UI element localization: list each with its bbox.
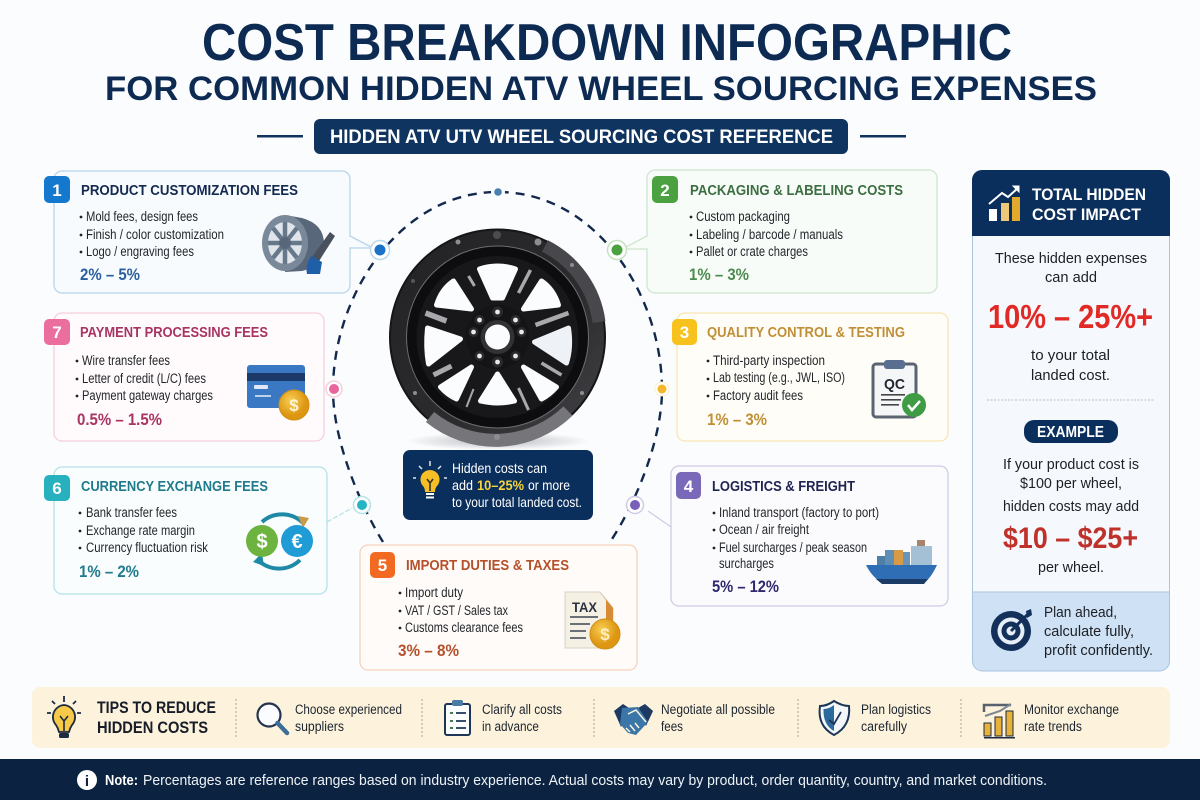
text: per wheel: per wheel. xyxy=(1038,560,1104,576)
callout: hidden costs summary: Hidden costs can xyxy=(452,460,547,476)
cost items: Factory audit fees xyxy=(713,388,803,403)
text: to your total landed cost: to your total xyxy=(1031,347,1110,364)
cost items xyxy=(713,505,879,571)
icon: info xyxy=(77,770,97,790)
footer: plan ahead: profit confidently. xyxy=(1044,642,1153,659)
badge 7 xyxy=(44,319,70,345)
icon: rising chart xyxy=(989,186,1020,221)
footer note bar: Percentages are reference ranges based on industry experience. Actual costs may vary by product, order quantity, country, and market conditions. xyxy=(143,773,1047,789)
footer: plan ahead: Plan ahead, xyxy=(1044,604,1117,621)
panel: 4 logistics and freight xyxy=(648,466,948,606)
tip: negotiate fees xyxy=(614,702,775,735)
tip: monitor exchange rate: Monitor exchange xyxy=(1024,702,1119,717)
panel: 3 quality control and testing xyxy=(672,313,948,441)
cost items: Fuel surcharges / peak season xyxy=(719,540,867,555)
badge 6: 6 xyxy=(52,479,62,498)
text: example description: If your product cost is xyxy=(1003,457,1139,473)
badge 3: 3 xyxy=(680,323,689,342)
cost items: Logo / engraving fees xyxy=(86,244,194,259)
callout: hidden costs summary: 10–25% xyxy=(477,477,524,493)
icon: QC clipboard: QC xyxy=(884,376,905,393)
callout: hidden costs summary: to your total landed cost. xyxy=(452,494,582,510)
tip: plan logistics: carefully xyxy=(861,719,907,734)
cost items xyxy=(79,505,208,555)
panel: tips to reduce hidden costs xyxy=(32,687,1170,748)
tip: choose experienced suppliers: Choose experienced xyxy=(295,702,402,717)
cost items xyxy=(707,353,845,403)
tip: clarify all costs xyxy=(445,700,562,735)
cost items xyxy=(399,585,523,635)
cost items xyxy=(80,209,224,259)
tip: monitor exchange rate: rate trends xyxy=(1024,719,1082,734)
range: 3% – 8% xyxy=(398,641,459,660)
tip: clarify all costs: in advance xyxy=(482,719,539,734)
panel: 6 currency exchange fees xyxy=(44,467,352,594)
cost items: Custom packaging xyxy=(696,209,790,224)
tip: plan logistics: Plan logistics xyxy=(861,702,931,717)
text: to your total landed cost xyxy=(1031,347,1110,384)
text: example description: $100 per wheel, xyxy=(1020,476,1122,492)
cost items: Finish / color customization xyxy=(86,227,224,242)
cost items: Third-party inspection xyxy=(713,353,825,368)
icon: currency exchange xyxy=(246,514,313,569)
tip: choose experienced suppliers xyxy=(258,702,402,734)
icon: currency exchange: $ xyxy=(256,531,268,553)
cost items: Bank transfer fees xyxy=(86,505,177,520)
cost items: Ocean / air freight xyxy=(719,522,809,537)
tip: monitor exchange rate xyxy=(984,702,1119,738)
range: 5% – 12% xyxy=(712,577,779,596)
cost items: Exchange rate margin xyxy=(86,523,195,538)
heading: LOGISTICS & FREIGHT xyxy=(712,479,855,495)
icon: tax document and coin xyxy=(565,592,620,649)
dashed orbit around wheel xyxy=(333,192,662,542)
footer note bar: Note: xyxy=(105,773,138,789)
cost items: Currency fluctuation risk xyxy=(86,540,208,555)
pill: example: EXAMPLE xyxy=(1037,424,1104,441)
big number: 10% to 25%+: 10% – 25%+ xyxy=(988,298,1153,335)
badge 2: 2 xyxy=(660,181,670,200)
cost items xyxy=(690,209,843,259)
cost items: surcharges xyxy=(719,556,774,571)
heading: PACKAGING & LABELING COSTS xyxy=(690,183,903,199)
heading xyxy=(97,699,216,737)
range: 2% – 5% xyxy=(80,265,140,284)
badge 6 xyxy=(44,475,70,501)
cost items: Labeling / barcode / manuals xyxy=(696,227,843,242)
pill: example xyxy=(1024,420,1118,443)
tip: choose experienced suppliers: suppliers xyxy=(295,719,344,734)
cost items xyxy=(76,353,213,403)
badge 4: 4 xyxy=(684,477,694,496)
title xyxy=(105,14,1097,108)
wheel image xyxy=(390,229,606,450)
text: example description xyxy=(1003,457,1139,515)
cost items: Import duty xyxy=(405,585,463,600)
range: 0.5% – 1.5% xyxy=(77,410,162,429)
heading: PAYMENT PROCESSING FEES xyxy=(80,325,268,341)
icon: cargo ship xyxy=(866,540,937,584)
cost items: Mold fees, design fees xyxy=(86,209,198,224)
text: hidden expenses can add: can add xyxy=(1045,269,1097,286)
icon: info: i xyxy=(85,773,89,790)
icon: credit card and coin: $ xyxy=(289,396,299,415)
callout: hidden costs summary: add xyxy=(452,477,473,493)
heading: PRODUCT CUSTOMIZATION FEES xyxy=(81,183,298,199)
icon: light bulb xyxy=(413,461,447,498)
tip: clarify all costs: Clarify all costs xyxy=(482,702,562,717)
panel: total hidden cost impact xyxy=(972,170,1170,671)
icon: credit card and coin xyxy=(247,365,309,420)
tip: negotiate fees: fees xyxy=(661,719,683,734)
banner: reference heading xyxy=(257,119,906,154)
icon: currency exchange: € xyxy=(291,531,303,553)
heading: QUALITY CONTROL & TESTING xyxy=(707,325,905,341)
cost items: Letter of credit (L/C) fees xyxy=(82,371,206,386)
badge 2 xyxy=(652,176,678,203)
cost items: Inland transport (factory to port) xyxy=(719,505,879,520)
cost items: Pallet or crate charges xyxy=(696,244,808,259)
icon: tax document and coin: $ xyxy=(600,625,610,644)
banner: reference heading: HIDDEN ATV UTV WHEEL SOURCING COST REFERENCE xyxy=(330,127,833,148)
badge 4 xyxy=(676,472,701,499)
cost items: Lab testing (e.g., JWL, ISO) xyxy=(713,370,845,385)
footer note bar xyxy=(0,759,1200,800)
tip: plan logistics xyxy=(820,701,931,735)
panel header: COST IMPACT xyxy=(1032,205,1142,224)
cost items: Payment gateway charges xyxy=(82,388,213,403)
badge 3 xyxy=(672,319,697,345)
badge 1: 1 xyxy=(52,181,62,200)
heading: CURRENCY EXCHANGE FEES xyxy=(81,479,268,495)
panel header xyxy=(972,170,1170,236)
title: FOR COMMON HIDDEN ATV WHEEL SOURCING EXPENSES xyxy=(105,70,1097,108)
badge 5: 5 xyxy=(378,556,387,575)
big number: $10 to $25+: $10 – $25+ xyxy=(1003,522,1138,555)
text: example description: hidden costs may add xyxy=(1003,499,1139,515)
panel: 5 import duties and taxes xyxy=(360,545,637,670)
cost items: Wire transfer fees xyxy=(82,353,170,368)
icon: target xyxy=(991,609,1032,651)
icon: QC clipboard xyxy=(873,360,926,417)
badge 7: 7 xyxy=(52,323,62,342)
range: 1% – 3% xyxy=(707,410,767,429)
badge 5 xyxy=(370,552,395,578)
icon: tax document and coin: TAX xyxy=(572,599,598,615)
text: to your total landed cost: landed cost. xyxy=(1031,367,1110,384)
range: 1% – 2% xyxy=(79,562,139,581)
icon: rim and brush xyxy=(262,215,335,274)
panel: 7 payment processing fees xyxy=(44,313,324,441)
heading: HIDDEN COSTS xyxy=(97,719,208,737)
tip: negotiate fees: Negotiate all possible xyxy=(661,702,775,717)
cost items: Customs clearance fees xyxy=(405,620,523,635)
panel: 2 packaging and labeling costs xyxy=(622,170,937,293)
panel: 1 product customization fees xyxy=(44,171,373,293)
text: hidden expenses can add: These hidden expenses xyxy=(995,250,1147,267)
range: 1% – 3% xyxy=(689,265,749,284)
footer: plan ahead xyxy=(972,592,1170,671)
callout: hidden costs summary: or more xyxy=(528,477,570,493)
panel header: TOTAL HIDDEN xyxy=(1032,185,1146,204)
cost items: VAT / GST / Sales tax xyxy=(405,603,508,618)
icon: tips bulb xyxy=(47,696,81,738)
callout: hidden costs summary xyxy=(403,450,593,520)
badge 1 xyxy=(44,176,70,203)
heading: TIPS TO REDUCE xyxy=(97,699,216,717)
text: hidden expenses can add xyxy=(995,250,1147,286)
title: COST BREAKDOWN INFOGRAPHIC xyxy=(202,14,1012,72)
heading: IMPORT DUTIES & TAXES xyxy=(406,558,569,574)
footer: plan ahead: calculate fully, xyxy=(1044,623,1134,640)
connector nodes xyxy=(326,185,669,514)
